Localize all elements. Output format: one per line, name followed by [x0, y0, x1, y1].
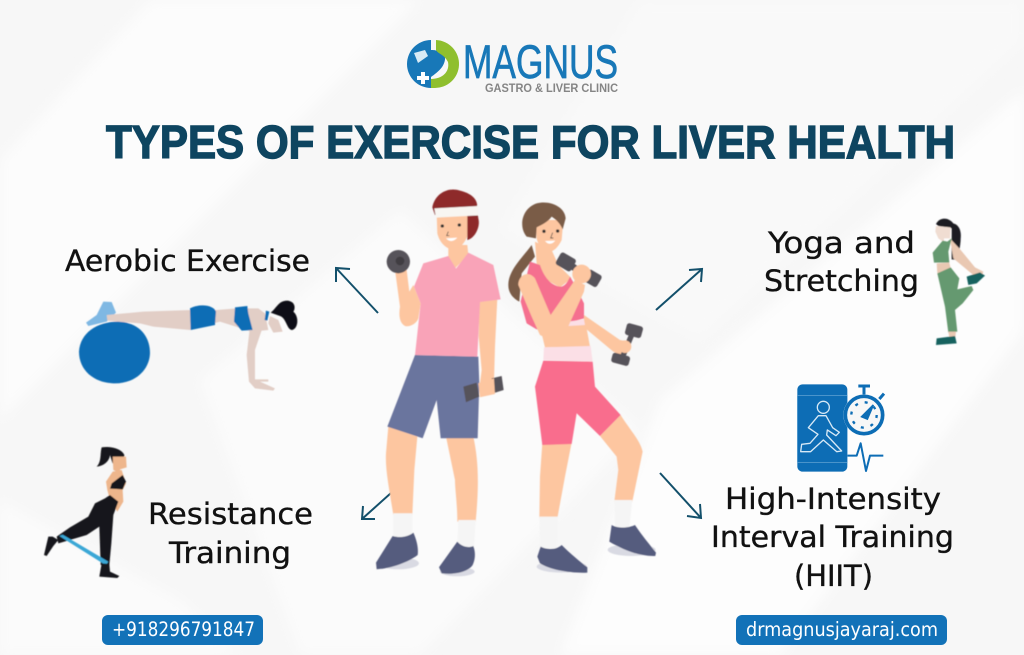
- tagline: GASTRO & LIVER CLINIC: [485, 83, 618, 95]
- logo: [407, 35, 618, 95]
- label: hiit: [711, 482, 954, 593]
- icon: hiit phone and stopwatch: [797, 384, 885, 472]
- arrow: to resistance training: [362, 493, 391, 519]
- arrow: to hiit: [660, 473, 701, 518]
- arrow: to yoga: [656, 269, 702, 310]
- illustration: standing stretch: [933, 219, 985, 345]
- label: hiit: Interval Training: [711, 520, 954, 554]
- exercise ball: [79, 322, 150, 383]
- illustration: plank on exercise ball: [79, 301, 297, 391]
- illustration: woman: [508, 202, 656, 573]
- label: hiit: High-Intensity: [725, 482, 941, 516]
- illustration: man: [376, 190, 504, 576]
- brand name: MAGNUS: [463, 35, 618, 88]
- label: hiit: (HIIT): [794, 559, 873, 593]
- button: website: drmagnusjayaraj.com: [746, 618, 938, 641]
- title: TYPES OF EXERCISE FOR LIVER HEALTH: [106, 116, 955, 168]
- label: aerobic exercise: Aerobic Exercise: [65, 244, 310, 278]
- label: yoga and stretching: Stretching: [764, 264, 919, 298]
- label: resistance training: Resistance: [148, 497, 313, 531]
- label: yoga and stretching: [764, 226, 919, 298]
- label: resistance training: Training: [168, 536, 291, 570]
- logo mark: [407, 40, 459, 88]
- label: resistance training: [148, 497, 313, 570]
- label: yoga and stretching: Yoga and: [767, 226, 915, 260]
- illustration: resistance band: [44, 447, 127, 578]
- button: phone number: +918296791847: [112, 618, 255, 641]
- arrow: to aerobic exercise: [336, 268, 378, 313]
- button: phone number: [102, 615, 263, 645]
